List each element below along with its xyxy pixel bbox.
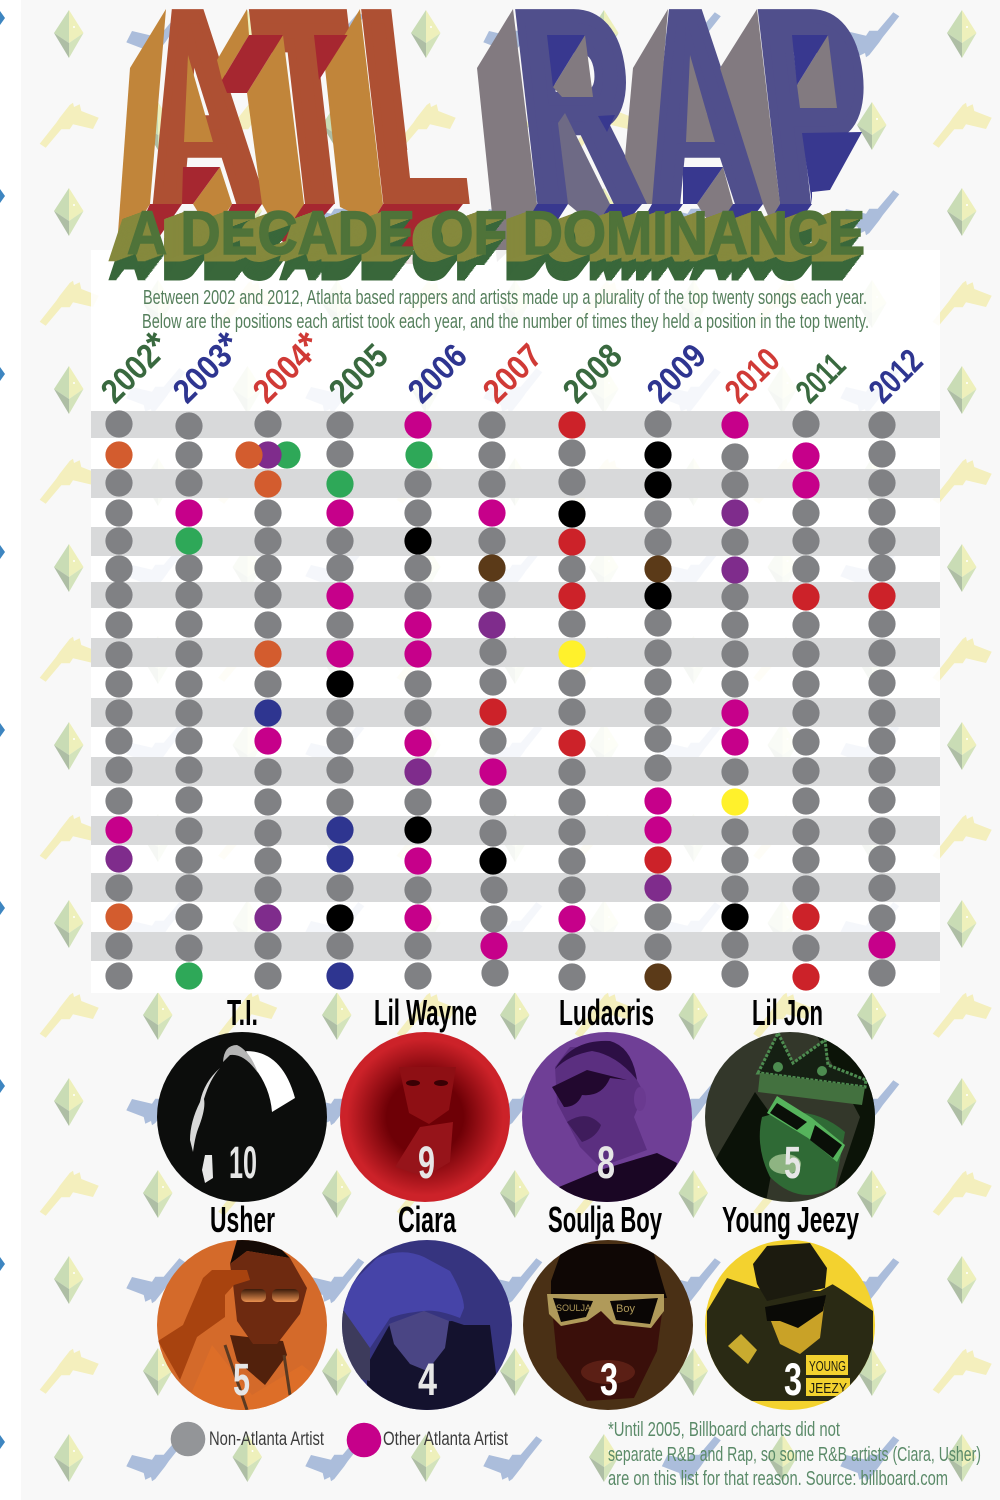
column 2003: [175, 412, 203, 990]
year column headings: 2011: [789, 346, 853, 411]
portrait: Young Jeezy, 3: YOUNG: [809, 1358, 846, 1375]
legend: non-Atlanta artist: Non-Atlanta Artist: [209, 1429, 325, 1450]
column 2007: [478, 411, 509, 987]
portrait: T.I., 10: [157, 1032, 327, 1202]
portrait: Soulja Boy, 3: 3: [600, 1354, 618, 1405]
portrait: Ciara, 4: 4: [418, 1354, 437, 1405]
artist names: Ludacris: [559, 992, 654, 1033]
column 2006: [404, 411, 433, 990]
year column headings: 2004*: [241, 323, 330, 411]
artist names: Soulja Boy: [548, 1199, 662, 1240]
column 2008: [558, 411, 586, 991]
portrait: Lil Jon, 5: 5: [784, 1137, 801, 1188]
year column headings: 2005: [321, 336, 395, 410]
extrusion: RAP sides: [477, 9, 862, 262]
year column headings: 2003*: [161, 323, 250, 411]
portrait: Soulja Boy, 3: [523, 1240, 693, 1410]
portrait: Young Jeezy, 3: [705, 1240, 875, 1410]
artist names: T.I.: [227, 992, 258, 1033]
portrait: Soulja Boy, 3: Boy: [616, 1303, 635, 1315]
column 2009: [644, 410, 672, 991]
year column headings: 2002*: [89, 323, 178, 411]
portrait: Lil Wayne, 9: 9: [418, 1137, 435, 1188]
portrait: Lil Jon, 5: [705, 1032, 880, 1207]
artist names: Young Jeezy: [722, 1199, 859, 1240]
artist names: Usher: [210, 1199, 275, 1240]
subtitle: A DECADE OF DOMINANCE: [127, 199, 865, 267]
portrait: Ludacris, 8: 8: [597, 1137, 615, 1188]
column 2002: [105, 410, 133, 990]
artist names: Ciara: [398, 1199, 457, 1240]
year column headings: 2007: [475, 336, 549, 410]
portrait: Soulja Boy, 3: SOULJA: [556, 1303, 591, 1313]
intro text: [142, 287, 869, 333]
portrait: Usher, 5: [157, 1240, 327, 1415]
legend: other Atlanta artist: Other Atlanta Artist: [383, 1429, 509, 1450]
footnote: [608, 1419, 981, 1490]
footnote: *Until 2005, Billboard charts did not: [608, 1419, 840, 1441]
legend: non-Atlanta artist: [171, 1422, 325, 1456]
column 2004: [235, 410, 301, 990]
portrait: Usher, 5: 5: [233, 1354, 250, 1405]
column 2010: [721, 411, 749, 988]
year column headings: 2008: [555, 336, 629, 410]
column 2011: [792, 410, 820, 991]
artist names: [210, 992, 859, 1240]
extrusion: ATL sides: [116, 9, 475, 264]
artist names: Lil Jon: [752, 992, 823, 1033]
portrait: Ciara, 4: [342, 1240, 512, 1415]
year column headings: [89, 323, 930, 411]
portrait: Lil Wayne, 9: [340, 1032, 510, 1202]
legend: other Atlanta artist: [347, 1423, 509, 1457]
portrait: Ludacris, 8: [522, 1032, 692, 1203]
year column headings: 2006: [400, 336, 474, 410]
portrait: Young Jeezy, 3: JEEZY: [809, 1380, 847, 1397]
column 2012: [868, 411, 896, 987]
portrait: T.I., 10: 10: [229, 1137, 257, 1188]
year column headings: 2012: [862, 342, 930, 411]
portrait: Young Jeezy, 3: 3: [784, 1354, 802, 1405]
column 2005: [326, 411, 354, 990]
year column headings: 2010: [717, 340, 787, 410]
chart: dot matrix of chart positions by year: [105, 410, 896, 991]
year column headings: 2009: [639, 336, 713, 410]
artist names: Lil Wayne: [374, 992, 477, 1033]
